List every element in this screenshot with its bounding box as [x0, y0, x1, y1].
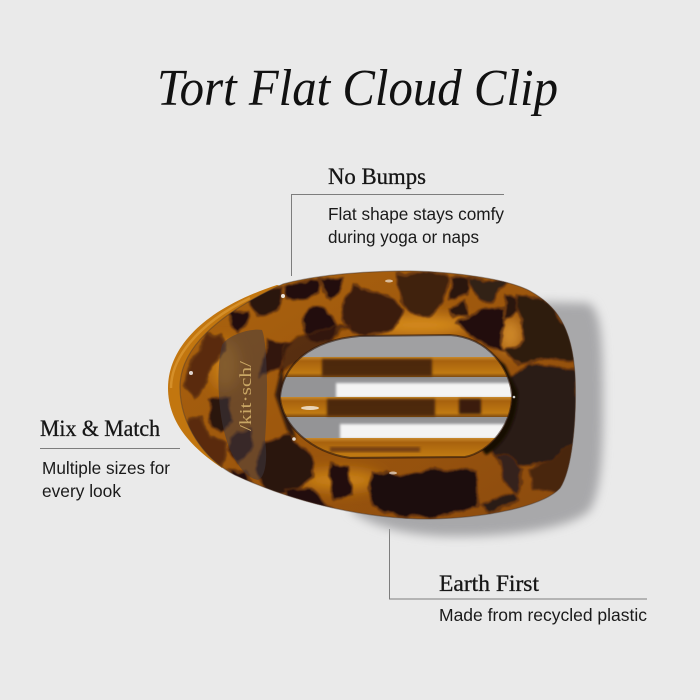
callout: Mix and Match: Mix & Match: [40, 416, 160, 441]
callout: Earth First: Earth First: [439, 571, 540, 596]
callout: Mix and Match: [40, 416, 180, 501]
title: Tort Flat Cloud Clip: [157, 60, 558, 117]
brand wordmark: /kit·sch/: [236, 361, 255, 431]
callout: No Bumps: No Bumps: [328, 164, 426, 189]
callout: No Bumps: during yoga or naps: [328, 227, 479, 247]
clip front face: [170, 265, 585, 525]
callout: Earth First: Made from recycled plastic: [439, 605, 647, 625]
clip outline sheen: [180, 271, 575, 519]
tine 2: [275, 397, 515, 417]
dark bevel crescents around the opening: [275, 350, 518, 455]
callout: No Bumps: [292, 164, 504, 276]
cast shadow: [350, 302, 603, 536]
amber back edge of clip: [168, 285, 300, 468]
oval opening with tines: [280, 335, 512, 458]
opening bevel: [280, 335, 512, 458]
callout: Earth First: [389, 529, 647, 625]
callout: Mix and Match: every look: [42, 481, 121, 501]
hair clip product image: [168, 265, 603, 536]
tine 1: [275, 357, 515, 377]
callout: Mix and Match: Multiple sizes for: [42, 458, 170, 478]
tortoise spots: [186, 274, 578, 517]
brand label pocket: [218, 330, 267, 480]
tine 3: [304, 438, 496, 458]
glossy highlights: [189, 371, 193, 375]
warm amber glow patches: [211, 315, 522, 490]
callout: No Bumps: Flat shape stays comfy: [328, 204, 504, 224]
